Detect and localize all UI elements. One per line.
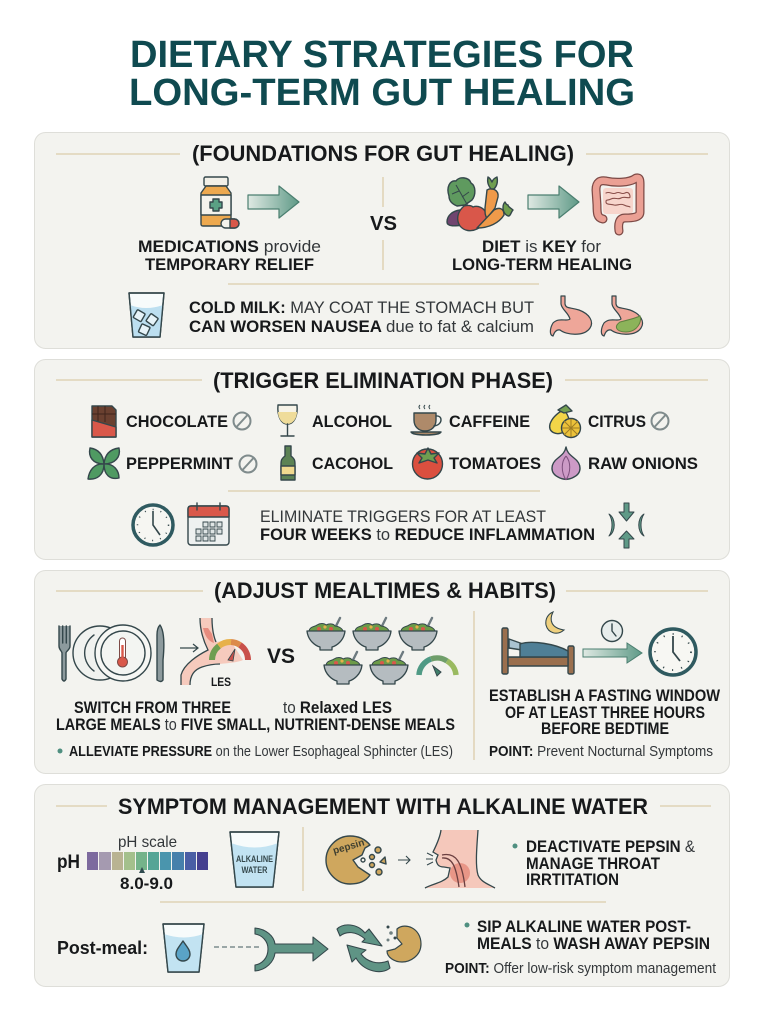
text: deactivate pepsin: DEACTIVATE PEPSIN & — [526, 838, 695, 856]
icon: vegetables — [447, 177, 513, 231]
item: chocolate: CHOCOLATE — [126, 413, 228, 431]
text: switch meals: SWITCH FROM THREE — [74, 699, 231, 717]
icon: pepsin breaking down — [326, 836, 386, 884]
text: fasting window: BEFORE BEDTIME — [541, 720, 669, 738]
icon: intestines — [596, 178, 640, 231]
title — [129, 34, 635, 114]
chart: pH scale: pH scale — [118, 834, 177, 851]
icon: large clock — [650, 629, 696, 675]
item: peppermint: PEPPERMINT — [126, 455, 233, 473]
icon: esophagus with LES gauge: LES — [211, 675, 231, 689]
text: deactivate pepsin: MANAGE THROAT — [526, 855, 660, 873]
item: raw onions: RAW ONIONS — [588, 455, 698, 473]
icon: relaxed LES gauge — [419, 658, 456, 676]
text: diet — [452, 238, 632, 274]
icon: plates with thermometer — [73, 625, 151, 681]
item: alcohol wine — [278, 405, 392, 436]
text: eliminate triggers: ELIMINATE TRIGGERS FOR AT LEAST — [260, 508, 546, 526]
item: citrus — [550, 405, 668, 438]
text: cold milk — [189, 299, 534, 336]
text: switch meals — [56, 699, 455, 734]
divider and VS label — [370, 177, 397, 270]
icon: glass of alkaline water — [230, 832, 279, 887]
title: DIETARY STRATEGIES FOR — [130, 34, 634, 76]
icon: stomach with nausea — [601, 296, 643, 336]
icon: moon — [546, 612, 564, 633]
dashed connector — [214, 946, 262, 948]
text: sip alkaline water — [464, 918, 710, 953]
title: LONG-TERM GUT HEALING — [129, 72, 635, 114]
icon: throat profile — [425, 830, 495, 888]
divider and VS label: VS — [370, 213, 397, 235]
item: alcohol wine: ALCOHOL — [312, 413, 392, 431]
item: peppermint — [88, 448, 256, 479]
text: low-risk symptom management: POINT: Offer low-risk symptom management — [445, 960, 717, 977]
arrow: medication to relief — [248, 186, 299, 218]
heading: mealtimes: (ADJUST MEALTIMES & HABITS) — [214, 578, 556, 603]
icon: fork — [59, 626, 70, 681]
icon: reduce inflammation arrows — [609, 503, 644, 548]
icon: glass with water drop — [163, 924, 204, 972]
text: deactivate pepsin — [512, 838, 695, 889]
item: bottle: CACOHOL — [312, 455, 393, 473]
text: alleviate pressure: ALLEVIATE PRESSURE on the Lower Esophageal Sphincter (LES) — [69, 743, 453, 760]
text: fasting window — [489, 687, 720, 738]
text: cold milk: COLD MILK: MAY COAT THE STOMACH BUT — [189, 299, 534, 317]
text: eliminate triggers — [260, 508, 595, 544]
text: switch meals: to Relaxed LES — [283, 699, 392, 717]
icon: bed — [502, 628, 574, 674]
label: post-meal: Post-meal: — [57, 938, 148, 958]
arrow: fasting window — [583, 643, 642, 663]
chart: pH scale: 8.0-9.0 — [120, 874, 173, 893]
text: eliminate triggers: FOUR WEEKS to REDUCE INFLAMMATION — [260, 526, 595, 544]
icon: calendar — [188, 503, 229, 545]
item: caffeine: CAFFEINE — [449, 413, 530, 431]
text: medications: MEDICATIONS provide — [138, 238, 321, 256]
item: chocolate — [92, 406, 250, 437]
item: tomatoes: TOMATOES — [449, 455, 541, 473]
text: prevent nocturnal symptoms: POINT: Prevent Nocturnal Symptoms — [489, 743, 713, 760]
arrow: diet to healing — [528, 186, 579, 218]
heading: symptom management: SYMPTOM MANAGEMENT WITH ALKALINE WATER — [118, 794, 648, 819]
panel: foundations for gut healing — [34, 132, 730, 348]
icon: clock — [133, 505, 173, 545]
panel: adjust mealtimes and habits — [34, 570, 730, 774]
icon: pepsin breaking down: pepsin — [332, 837, 366, 857]
text: medications — [138, 238, 321, 274]
icon: glass of alkaline water: ALKALINE — [236, 854, 273, 864]
icon: five small bowls — [307, 618, 437, 684]
text: diet: DIET is KEY for — [482, 238, 602, 256]
text: medications: TEMPORARY RELIEF — [145, 256, 314, 274]
item: caffeine — [411, 405, 530, 435]
icon: small clock — [602, 620, 622, 642]
panel: trigger elimination phase — [34, 360, 730, 560]
arrow: wash-through funnel arrow — [255, 928, 328, 971]
icon: stomach normal — [550, 296, 592, 336]
text: diet: LONG-TERM HEALING — [452, 256, 632, 274]
icon: pepsin washed away — [386, 926, 421, 962]
item: citrus: CITRUS — [588, 413, 646, 431]
chart: pH scale — [57, 834, 208, 893]
icon: recycling arrows — [337, 925, 390, 972]
item: bottle — [281, 446, 393, 480]
chart: pH scale: pH — [57, 852, 80, 873]
label: VS: VS — [267, 645, 295, 668]
arrow: pepsin to throat — [398, 856, 410, 864]
text: fasting window: OF AT LEAST THREE HOURS — [505, 704, 705, 722]
text: sip alkaline water: SIP ALKALINE WATER POST- — [477, 918, 691, 936]
icon: knife — [157, 625, 164, 682]
icon: glass of alkaline water: WATER — [242, 865, 268, 875]
item: raw onions — [552, 447, 698, 480]
panel: symptom management with alkaline water — [34, 784, 730, 986]
text: cold milk: CAN WORSEN NAUSEA due to fat & calcium — [189, 318, 534, 336]
text: deactivate pepsin: IRRTITATION — [526, 871, 619, 889]
icon: medication bottle — [201, 177, 239, 228]
text: sip alkaline water: MEALS to WASH AWAY PEPSIN — [477, 935, 710, 953]
heading: foundations: (FOUNDATIONS FOR GUT HEALING) — [192, 141, 574, 166]
text: switch meals: LARGE MEALS to FIVE SMALL, NUTRIENT-DENSE MEALS — [56, 716, 455, 734]
icon: glass of cold milk — [129, 293, 164, 337]
item: tomatoes — [412, 448, 541, 479]
icon: esophagus with LES gauge — [180, 618, 248, 689]
heading: trigger elimination: (TRIGGER ELIMINATION PHASE) — [213, 368, 553, 393]
text: fasting window: ESTABLISH A FASTING WINDOW — [489, 687, 720, 705]
